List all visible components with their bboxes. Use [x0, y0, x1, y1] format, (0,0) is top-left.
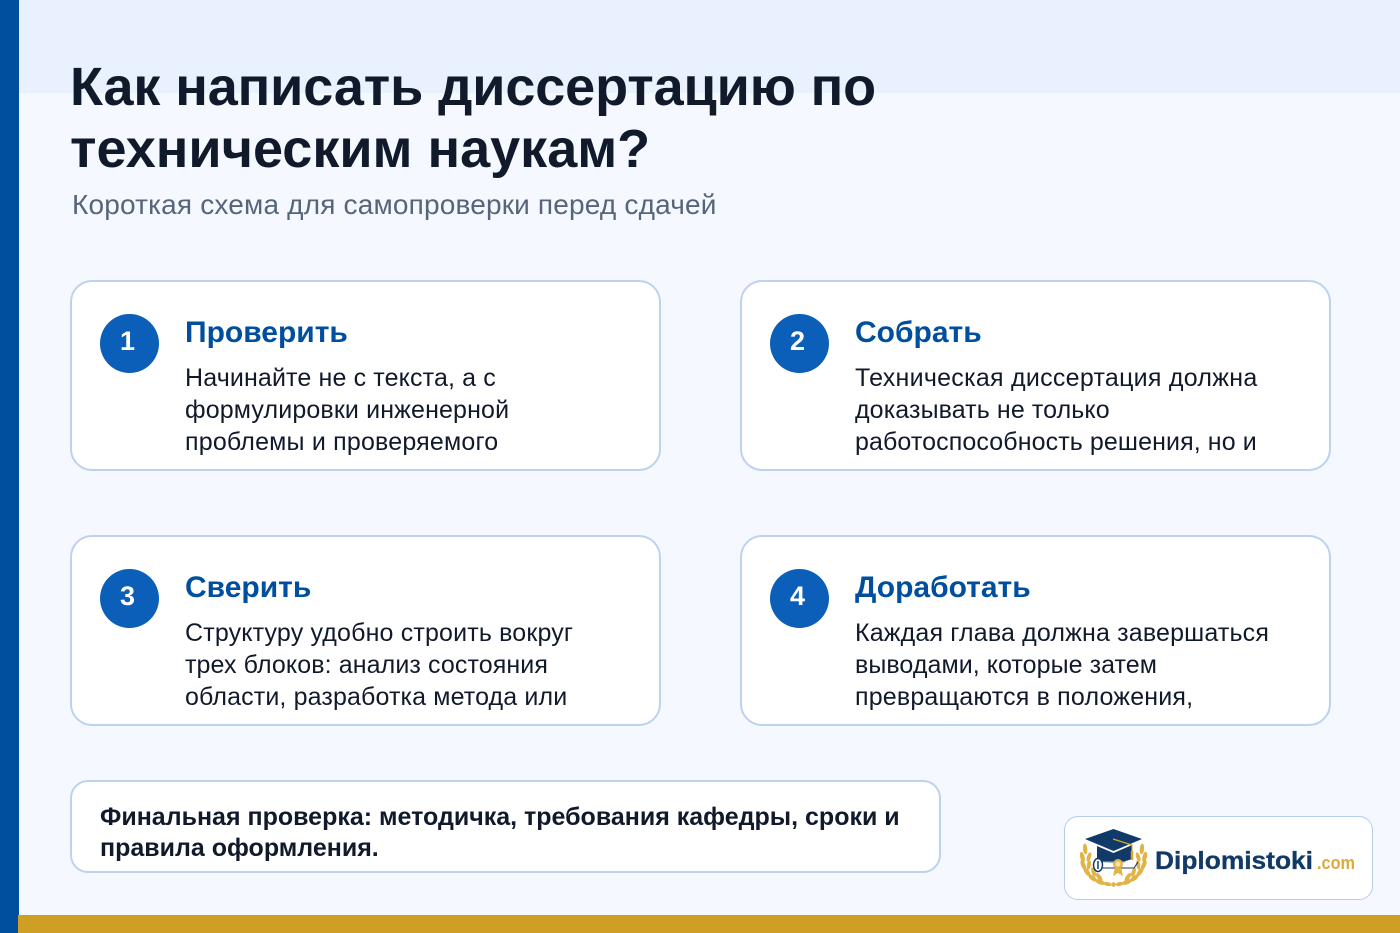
- step 1 text: [185, 364, 509, 456]
- step 4 number: 4: [790, 581, 805, 611]
- step 4 text: [855, 619, 1269, 711]
- step 1 text: Начинайте не с текста, а с: [185, 364, 496, 392]
- logo card: [1064, 816, 1373, 900]
- step 3 text: Структуру удобно строить вокруг: [185, 619, 573, 647]
- title: [70, 57, 876, 179]
- top header band: [18, 0, 1400, 93]
- logo: [1080, 829, 1355, 887]
- step 2 heading: Собрать: [855, 316, 982, 349]
- step 2 text: [855, 364, 1258, 456]
- step 3 heading: Сверить: [185, 571, 311, 604]
- final check text: Финальная проверка: методичка, требования кафедры, сроки и: [100, 803, 900, 831]
- final check text: [100, 803, 900, 862]
- step 3 text: трех блоков: анализ состояния: [185, 651, 548, 679]
- step 1 number: 1: [120, 326, 135, 356]
- left accent bar: [0, 0, 19, 933]
- step 3 number: 3: [120, 581, 135, 611]
- callout: final check: [70, 780, 941, 873]
- step 3 number: [100, 569, 159, 628]
- step 4 text: выводами, которые затем: [855, 651, 1157, 679]
- step 3 text: области, разработка метода или: [185, 683, 567, 711]
- step 4 text: превращаются в положения,: [855, 683, 1193, 711]
- step 2 text: работоспособность решения, но и: [855, 428, 1257, 456]
- final check text: правила оформления.: [100, 834, 379, 862]
- step 1 text: проблемы и проверяемого: [185, 428, 498, 456]
- panel: step 2: [740, 280, 1331, 471]
- step 2 number: [770, 314, 829, 373]
- step 2 number: 2: [790, 326, 805, 356]
- title: техническим наукам?: [70, 119, 650, 179]
- icon: graduation cap and laurel: [1079, 829, 1148, 886]
- logo domain: .com: [1317, 853, 1355, 873]
- panel: step 4: [740, 535, 1331, 726]
- step 2 text: доказывать не только: [855, 396, 1110, 424]
- panel: step 1: [70, 280, 661, 471]
- step 4 text: Каждая глава должна завершаться: [855, 619, 1269, 647]
- step 1 number: [100, 314, 159, 373]
- panel: step 3: [70, 535, 661, 726]
- subtitle: Короткая схема для самопроверки перед сдачей: [72, 189, 717, 220]
- step 1 heading: Проверить: [185, 316, 348, 349]
- logo wordmark: Diplomistoki: [1155, 847, 1313, 875]
- step 4 heading: Доработать: [855, 571, 1031, 604]
- step 1 text: формулировки инженерной: [185, 396, 509, 424]
- step 2 text: Техническая диссертация должна: [855, 364, 1258, 392]
- title: Как написать диссертацию по: [70, 57, 876, 117]
- bottom gold bar: [18, 915, 1400, 933]
- step 3 text: [185, 619, 573, 711]
- step 4 number: [770, 569, 829, 628]
